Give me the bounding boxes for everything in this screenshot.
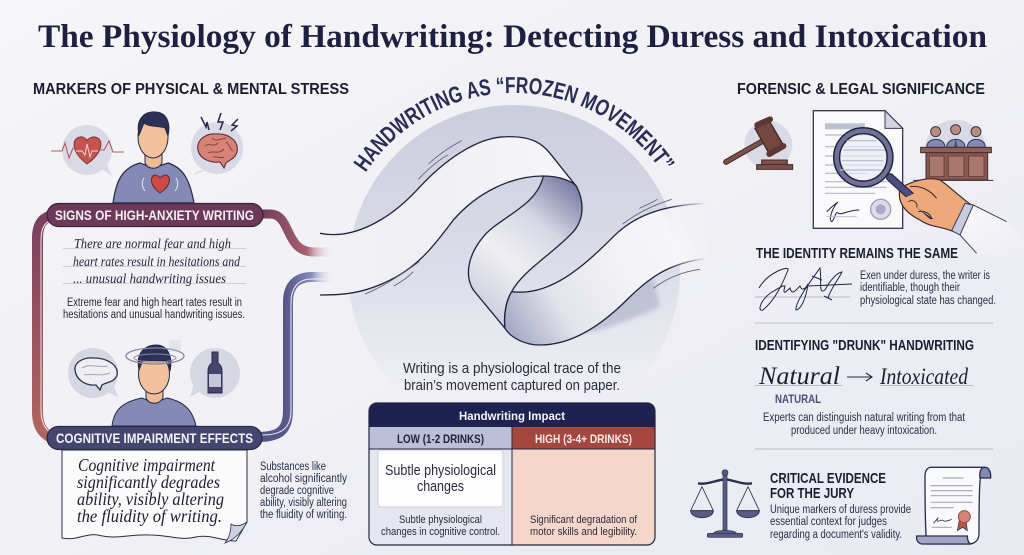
- arrow: [847, 373, 872, 381]
- label pill: cognitive impairment effects: COGNITIVE IMPAIRMENT EFFECTS: [56, 431, 253, 446]
- label pill: cognitive impairment effects: [47, 426, 262, 450]
- text: identity description: [860, 270, 996, 307]
- label: natural: NATURAL: [775, 394, 821, 406]
- text: evidence description: Unique markers of duress provide: [770, 504, 911, 516]
- icon: dizzy person: [112, 341, 196, 426]
- cell text: low: changes in cognitive control.: [381, 526, 500, 538]
- text: experts: Experts can distinguish natural writing from that: [763, 412, 966, 424]
- torn note: [62, 450, 247, 543]
- text: substances description: Substances like: [260, 461, 326, 473]
- cell text: low: Subtle physiological: [399, 514, 482, 526]
- icon: document: [813, 111, 903, 228]
- signature: [755, 268, 852, 310]
- column: high: HIGH (3-4+ DRINKS): [535, 432, 632, 446]
- text: identity description: Exen under duress, the writer is: [860, 270, 990, 282]
- text: substances description: ability, visibly altering: [260, 497, 347, 509]
- background disc: [348, 105, 680, 437]
- torn note: the fluidity of writing.: [77, 506, 222, 526]
- torn note: significantly degrades: [77, 472, 220, 492]
- icon: jury box: [913, 120, 993, 180]
- icon: bottle bubble: [190, 348, 240, 398]
- panel: markers of stress: [33, 81, 349, 543]
- icon: heart bubble: [51, 125, 124, 176]
- connector: blue frame: [258, 277, 338, 437]
- table: handwriting impact: [369, 403, 655, 545]
- heading: critical evidence: [770, 470, 886, 502]
- text: identity description: identifiable, though their: [860, 282, 960, 294]
- curved heading: HANDWRITING AS “FROZEN MOVEMENT”: [353, 77, 675, 172]
- heading: forensic: FORENSIC & LEGAL SIGNIFICANCE: [737, 81, 985, 98]
- text: substances description: degrade cognitive: [260, 485, 334, 497]
- icon: certificate scroll: [917, 467, 991, 544]
- text: substances description: alcohol significantly: [260, 473, 347, 485]
- cell text: high: [530, 514, 638, 538]
- cell text: high: motor skills and legibility.: [530, 526, 637, 538]
- icon: scales of justice: [691, 470, 759, 537]
- script comparison: Natural: [758, 363, 840, 390]
- cell text: high: Significant degradation of: [530, 514, 638, 526]
- text: anxiety description: [63, 297, 245, 321]
- heading: critical evidence: FOR THE JURY: [770, 485, 854, 502]
- text: substances description: [260, 461, 347, 521]
- section: identifying drunk handwriting: [755, 338, 974, 437]
- icon: stressed person: [113, 112, 194, 203]
- panel: forensic and legal significance: [691, 81, 1024, 544]
- text: experts: produced under heavy intoxication.: [791, 425, 937, 437]
- handwriting sample: anxiety: heart rates result in hesitations and: [73, 254, 240, 269]
- caption: [403, 360, 621, 394]
- illustration: gavel, document, jury, hand: [726, 111, 1024, 257]
- text: identity description: physiological state has changed.: [860, 295, 996, 307]
- heading: markers: MARKERS OF PHYSICAL & MENTAL STRESS: [33, 81, 349, 98]
- panel: frozen movement: [312, 77, 705, 546]
- cell text: low: [381, 514, 500, 538]
- column: low: LOW (1-2 DRINKS): [397, 432, 484, 446]
- section: critical evidence: [691, 467, 991, 544]
- icon: magnifier and hand: [837, 131, 1024, 257]
- text: substances description: the fluidity of writing.: [260, 509, 347, 521]
- card: subtle changes: changes: [417, 478, 464, 495]
- card: subtle changes: [378, 450, 503, 507]
- text: evidence description: essential context for judges: [770, 516, 887, 528]
- connector: maroon frame: [38, 214, 338, 440]
- heading: critical evidence: CRITICAL EVIDENCE: [770, 470, 886, 487]
- table title: Handwriting Impact: [459, 409, 565, 423]
- handwriting sample: anxiety: There are normal fear and high: [74, 236, 231, 251]
- text: evidence description: [770, 504, 911, 541]
- caption: brain’s movement captured on paper.: [404, 377, 620, 394]
- torn note: ability, visibly altering: [77, 489, 224, 509]
- text: evidence description: regarding a document's validity.: [770, 529, 902, 541]
- card: subtle changes: Subtle physiological: [385, 462, 496, 479]
- handwriting sample: anxiety: ... unusual handwriting issues: [73, 271, 226, 286]
- title: The Physiology of Handwriting: Detecting Duress and Intoxication: [38, 19, 987, 55]
- caption: Writing is a physiological trace of the: [403, 360, 621, 377]
- script comparison: [755, 363, 973, 390]
- label pill: signs of high-anxiety writing: [47, 204, 263, 226]
- text: anxiety description: hesitations and unusual handwriting issues.: [63, 309, 245, 321]
- label pill: signs of high-anxiety writing: SIGNS OF HIGH-ANXIETY WRITING: [55, 208, 254, 223]
- torn note: Cognitive impairment: [78, 455, 216, 475]
- text: anxiety description: Extreme fear and high heart rates result in: [67, 297, 242, 309]
- text: experts: [763, 412, 966, 437]
- section: identity remains the same: THE IDENTITY REMAINS THE SAME: [756, 246, 958, 262]
- ribbon illustration: [310, 137, 707, 345]
- icon: brain with lightning: [191, 113, 243, 176]
- icon: foggy brain bubble: [68, 348, 118, 398]
- script comparison: Intoxicated: [879, 364, 968, 389]
- icon: gavel: [726, 119, 793, 169]
- section: identity remains the same: [755, 246, 996, 310]
- handwriting sample: anxiety: [63, 236, 246, 286]
- section: identifying drunk handwriting: IDENTIFYING "DRUNK" HANDWRITING: [755, 338, 974, 354]
